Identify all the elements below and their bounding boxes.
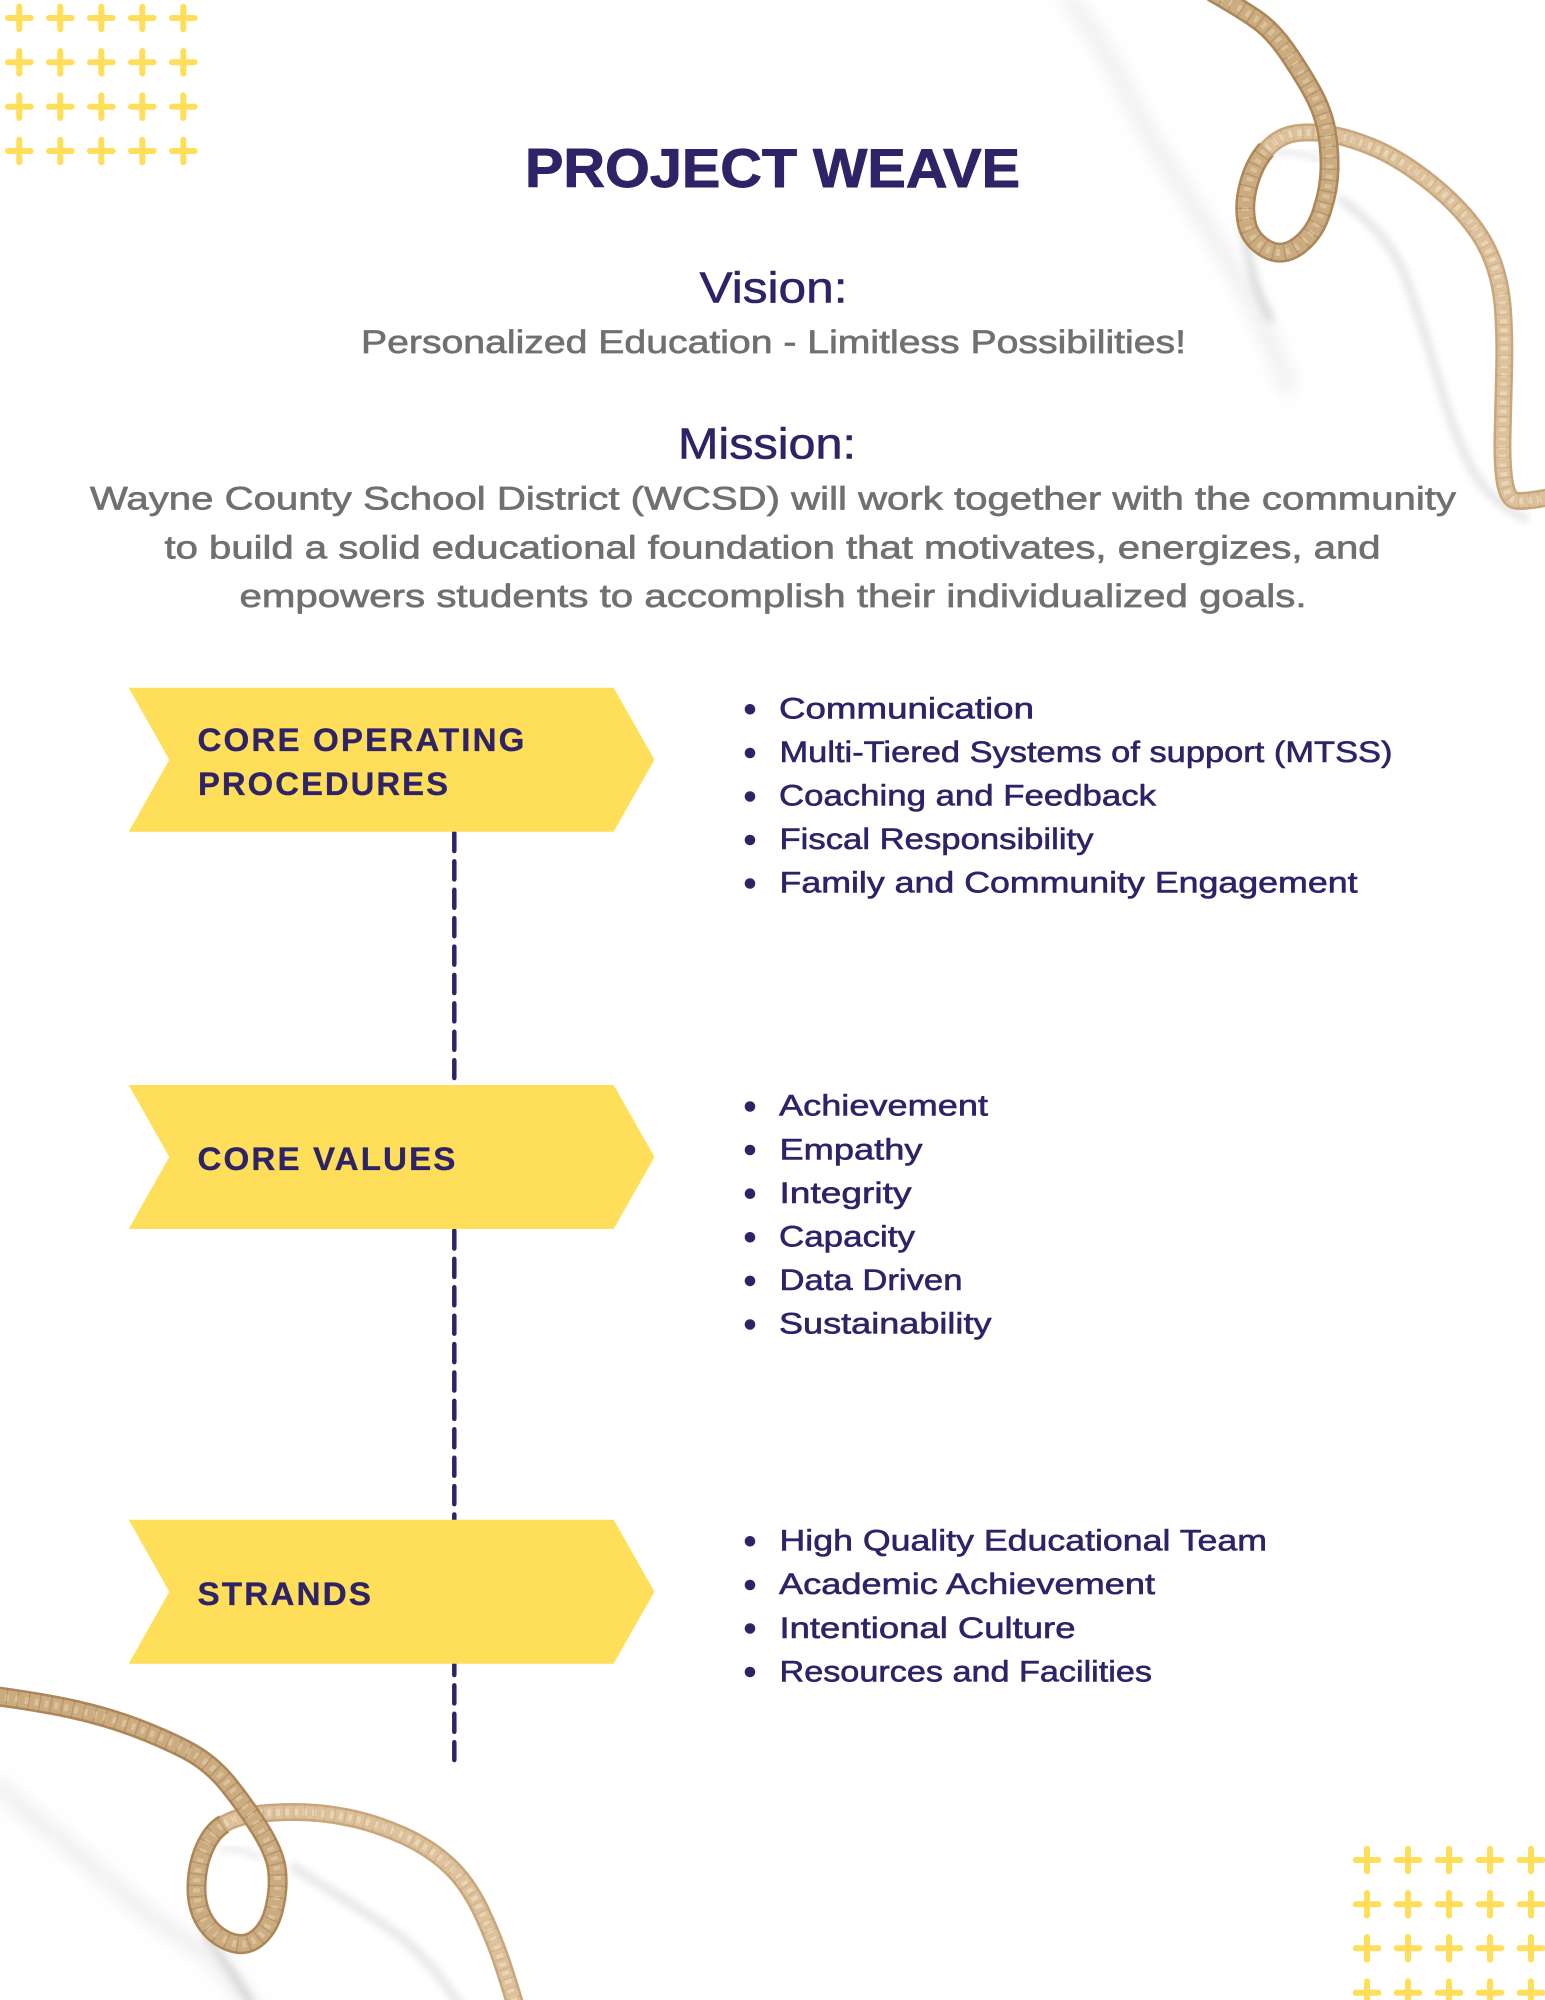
vision block [361,264,1186,360]
list: core values [745,1090,992,1341]
list: core values: Integrity [780,1177,912,1210]
list: core operating procedures: Fiscal Responsibility [780,823,1094,856]
banner: core operating procedures: CORE OPERATING [198,722,526,758]
dashed connector: values to strands [452,1230,457,1522]
list: strands: Intentional Culture [780,1612,1076,1645]
list: core operating procedures: Multi-Tiered Systems of support (MTSS) [780,736,1392,769]
vision statement: Personalized Education - Limitless Possibilities! [361,324,1186,360]
mission statement [90,480,1456,614]
mission heading: Mission: [678,420,856,468]
list: core values: Empathy [780,1133,922,1166]
dashed connector: strands to end [452,1657,457,1760]
list: core values: Data Driven [780,1264,962,1297]
list: strands [745,1524,1267,1688]
mission statement: Wayne County School District (WCSD) will work together with the community [90,480,1456,516]
dashed connector: procedures to values [452,833,457,1078]
list: core operating procedures: Coaching and Feedback [779,780,1157,813]
mission statement: to build a solid educational foundation that motivates, energizes, and [164,530,1380,566]
list: core values: Sustainability [779,1308,992,1341]
title: PROJECT WEAVE [525,137,1020,199]
banner: core operating procedures [129,688,654,832]
banner: strands [129,1520,654,1664]
mission block [90,420,1456,614]
list: core operating procedures: Family and Community Engagement [780,867,1358,900]
decorative plus grid: bottom right [1356,1849,1542,2000]
list: core operating procedures [745,692,1392,900]
banner: core values: CORE VALUES [198,1141,458,1177]
rope: bottom left with shadows [0,1696,520,2000]
banner: core operating procedures: PROCEDURES [198,766,450,802]
list: strands: High Quality Educational Team [780,1524,1267,1557]
rope: top right with shadows [1070,0,1545,518]
vision heading: Vision: [700,264,848,312]
list: strands: Resources and Facilities [780,1655,1152,1688]
list: strands: Academic Achievement [779,1568,1156,1601]
banner: strands: STRANDS [198,1576,373,1612]
list: core values: Capacity [779,1220,915,1254]
banner: core values [129,1085,654,1229]
mission statement: empowers students to accomplish their individualized goals. [240,578,1306,614]
decorative plus grid: top left [8,7,195,162]
list: core values: Achievement [779,1090,989,1122]
list: core operating procedures: Communication [779,692,1034,726]
